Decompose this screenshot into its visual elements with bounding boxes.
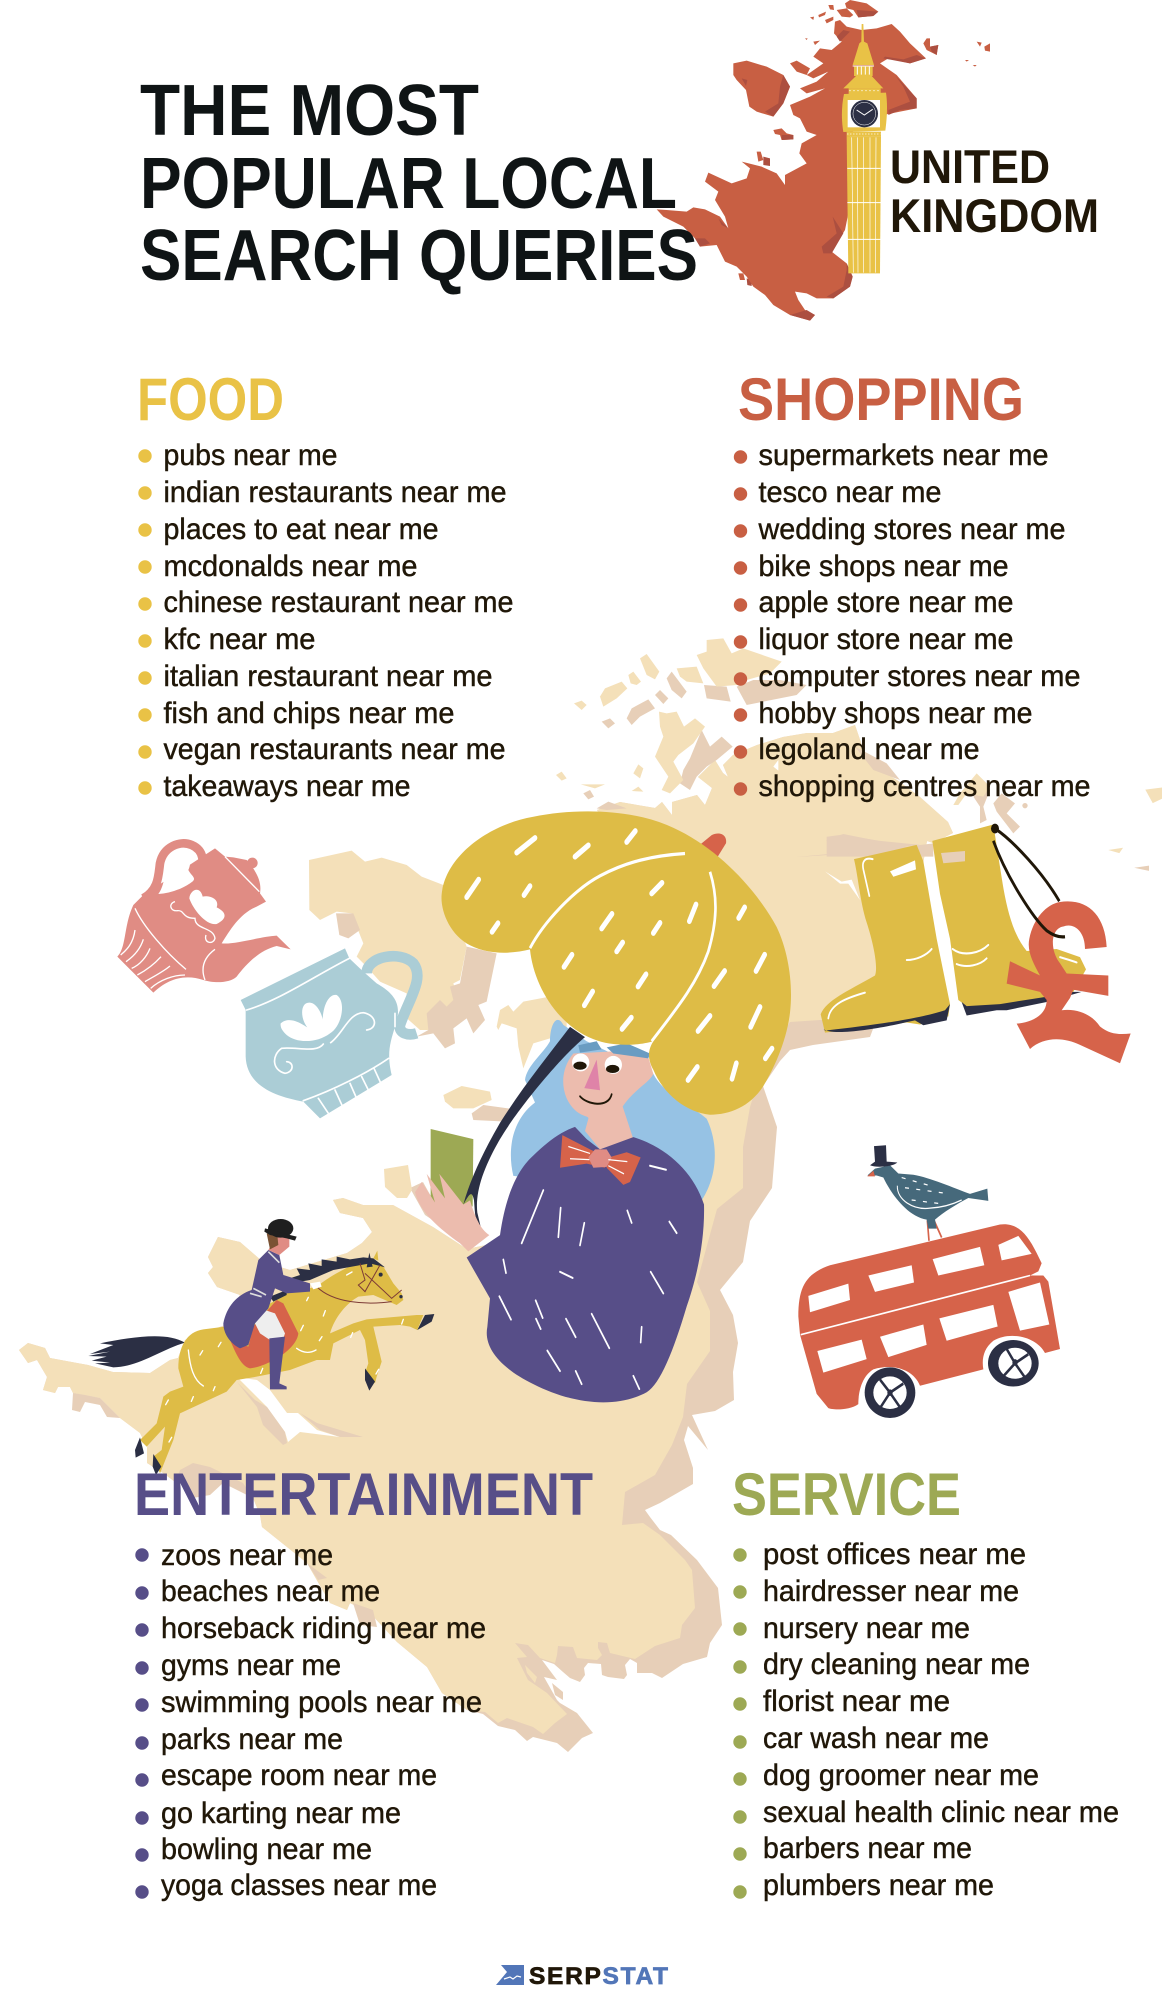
bullets: entertainment (135, 1548, 149, 1899)
list: entertainment: zoos near me (161, 1539, 333, 1572)
list: shopping: computer stores near me (758, 660, 1080, 693)
list: service: post offices near me (763, 1538, 1026, 1571)
panel: entertainment (134, 1461, 593, 1902)
list: entertainment: parks near me (161, 1723, 343, 1756)
list: service: sexual health clinic near me (763, 1796, 1119, 1829)
umbrella handle (463, 1027, 585, 1231)
icon: teapot (117, 843, 291, 993)
list: food: italian restaurant near me (164, 660, 492, 693)
icon: red double-decker bus (798, 1224, 1060, 1418)
icon: teacup (241, 948, 417, 1118)
list: food: mcdonalds near me (164, 550, 418, 583)
logo icon (496, 1965, 524, 1985)
list: shopping: shopping centres near me (758, 770, 1090, 803)
panel: service (732, 1461, 1119, 1902)
list: shopping: bike shops near me (758, 550, 1008, 583)
list: shopping: liquor store near me (758, 623, 1014, 656)
list: service (763, 1538, 1119, 1902)
list: service: car wash near me (763, 1722, 989, 1755)
title: SEARCH QUERIES (140, 216, 698, 296)
list: shopping: supermarkets near me (758, 439, 1048, 472)
list: service: plumbers near me (763, 1869, 994, 1902)
list: entertainment: beaches near me (161, 1575, 380, 1608)
subtitle: United Kingdom (890, 140, 1099, 242)
list: service: nursery near me (763, 1612, 970, 1645)
heading: food: FOOD (137, 366, 284, 433)
bullets: service (733, 1548, 747, 1899)
heading: shopping: SHOPPING (738, 366, 1024, 433)
rider coat (223, 1250, 310, 1348)
face and neck (563, 1051, 653, 1149)
background map: large beige UK (19, 638, 1162, 1752)
saddle blanket (230, 1300, 298, 1368)
list: service: florist near me (763, 1685, 950, 1718)
Scottish islands traced on 3x crop (556, 638, 1028, 857)
list: shopping: legoland near me (758, 733, 980, 766)
list: shopping: hobby shops near me (758, 697, 1032, 730)
green book (431, 1129, 473, 1207)
illustration: woman with umbrella (415, 811, 791, 1402)
list: shopping: wedding stores near me (758, 513, 1066, 546)
list: entertainment: go karting near me (161, 1797, 401, 1830)
rider head and bowler hat (264, 1219, 297, 1255)
umbrella tip (699, 834, 726, 858)
list: shopping (758, 439, 1090, 803)
icon: wellington boots (821, 824, 1086, 1033)
list: food: kfc near me (164, 623, 316, 656)
heading: service: SERVICE (732, 1461, 961, 1528)
list: service: hairdresser near me (763, 1575, 1019, 1608)
list: entertainment: yoga classes near me (161, 1869, 437, 1902)
icon: Big Ben clock tower (842, 24, 887, 273)
illustration: horse and rider (88, 1219, 434, 1475)
eyebrows (578, 1041, 650, 1058)
horse hooves (135, 1314, 434, 1475)
horse mane (270, 1257, 385, 1302)
list: entertainment: escape room near me (161, 1759, 437, 1792)
list: food: pubs near me (164, 439, 338, 472)
subtitle: United Kingdom: KINGDOM (890, 189, 1099, 242)
bow tie (560, 1135, 641, 1185)
nose (584, 1060, 600, 1090)
list: shopping: tesco near me (758, 476, 942, 509)
rider boot (269, 1337, 287, 1389)
heading: entertainment: ENTERTAINMENT (134, 1461, 593, 1528)
title: THE MOST (140, 71, 479, 151)
list: service: dry cleaning near me (763, 1648, 1030, 1681)
icon: bird with top hat (867, 1145, 988, 1241)
list: service: dog groomer near me (763, 1759, 1039, 1792)
panel: food (137, 366, 514, 803)
logo wordmark: SERPSTAT (529, 1963, 668, 1990)
orange UK map (657, 0, 990, 321)
list: entertainment: gyms near me (161, 1649, 341, 1682)
logo: Serpstat (496, 1963, 668, 1990)
Far-right islets traced on stretched crop (1108, 787, 1162, 871)
hand (415, 1174, 489, 1251)
umbrella canopy (441, 811, 791, 1115)
bullets: food (138, 449, 152, 795)
jumper (467, 1127, 704, 1402)
title (140, 71, 698, 296)
list: entertainment: swimming pools near me (161, 1686, 482, 1719)
Beige under and around boots (795, 835, 920, 900)
subtitle: United Kingdom: UNITED (890, 140, 1050, 193)
bus wheels (865, 1340, 1039, 1418)
bridle and reins (317, 1263, 402, 1303)
clock face (851, 100, 878, 127)
list: shopping: apple store near me (758, 586, 1014, 619)
panel: shopping (734, 366, 1090, 803)
rider breeches (255, 1308, 285, 1340)
list: entertainment: horseback riding near me (161, 1612, 486, 1645)
list: food: fish and chips near me (164, 697, 454, 730)
list: food: takeaways near me (164, 770, 410, 803)
smile (580, 1094, 612, 1104)
eyes (572, 1053, 622, 1074)
horse body (140, 1260, 423, 1473)
horse tail (88, 1336, 185, 1367)
hair (511, 1020, 715, 1200)
title: POPULAR LOCAL (140, 144, 677, 224)
list: entertainment (161, 1539, 486, 1902)
bullets: shopping (734, 450, 747, 796)
icon: pound sign with tag cord (991, 824, 1131, 1063)
list: food: indian restaurants near me (164, 476, 506, 509)
Ireland traced on 3x crop (309, 851, 567, 1122)
list: food: places to eat near me (164, 513, 438, 546)
list: service: barbers near me (763, 1832, 972, 1865)
list: entertainment: bowling near me (161, 1833, 372, 1866)
list: food: vegan restaurants near me (164, 733, 506, 766)
list: food: chinese restaurant near me (164, 586, 514, 619)
list: food (164, 439, 514, 803)
